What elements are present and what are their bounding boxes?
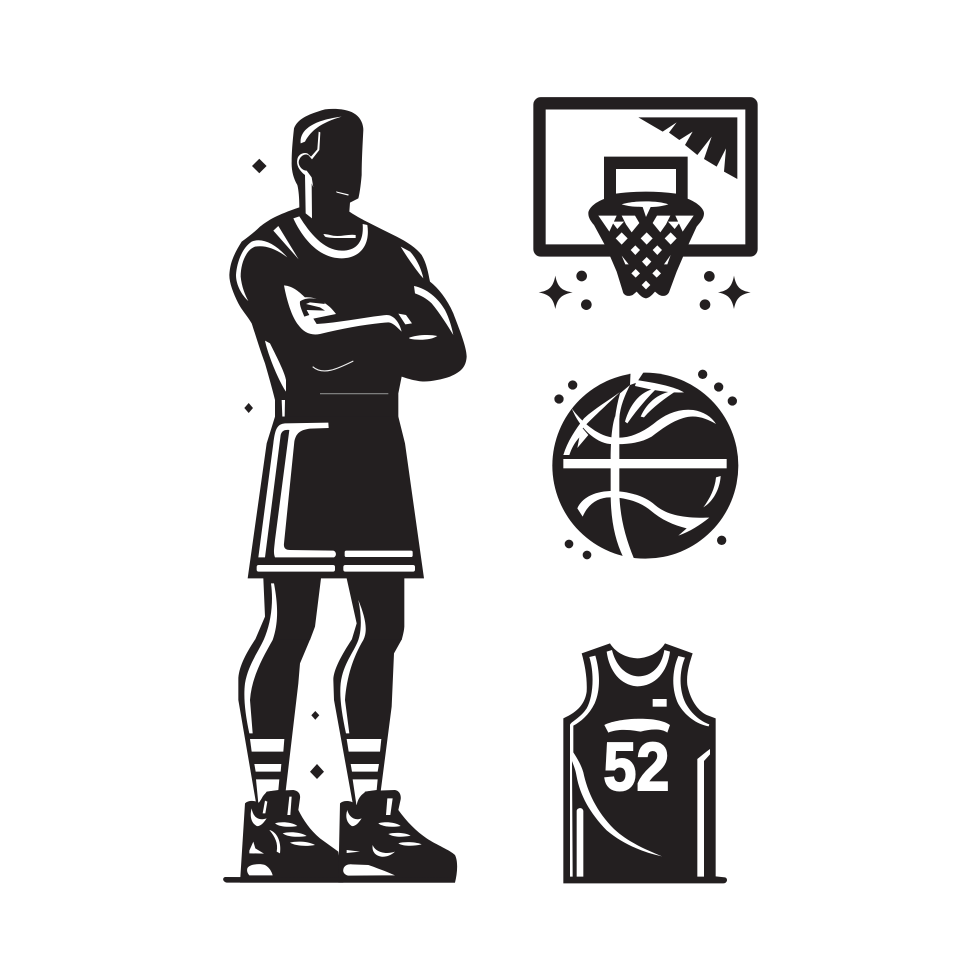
jersey xyxy=(563,643,727,883)
left armhole trim xyxy=(570,656,662,877)
upper left feather xyxy=(563,392,620,455)
jersey body xyxy=(563,643,727,883)
rim bracket xyxy=(604,157,688,200)
ball dots xyxy=(554,394,564,404)
floor line xyxy=(223,877,455,883)
upper wavy seam xyxy=(572,408,716,444)
player upper body xyxy=(229,109,467,420)
jersey number: 52 xyxy=(603,729,669,805)
rim and net xyxy=(588,192,704,298)
player shorts and thighs xyxy=(248,417,424,640)
torso highlights xyxy=(265,341,286,392)
lower wavy seam xyxy=(577,491,709,536)
upper right feather band xyxy=(635,380,684,393)
chest tag xyxy=(653,699,667,707)
abdomen lines xyxy=(313,361,353,371)
vertical seam xyxy=(611,417,634,559)
backboard shade xyxy=(638,117,737,179)
right side stripe xyxy=(697,749,710,877)
armhole stripe xyxy=(273,226,299,259)
hoop dots xyxy=(576,271,587,281)
legs xyxy=(238,640,310,807)
left side stripe xyxy=(577,808,583,877)
ball body xyxy=(552,373,738,559)
player legs and shoes xyxy=(223,583,457,883)
sparkle diamonds around player xyxy=(244,159,324,779)
right armhole trim xyxy=(673,656,709,726)
left shoe xyxy=(240,790,343,883)
ear and neck highlight xyxy=(297,132,320,218)
hair highlight xyxy=(301,117,342,143)
backboard xyxy=(539,103,751,250)
player figure xyxy=(223,109,467,883)
horizontal seam xyxy=(563,459,727,468)
collar trim xyxy=(607,650,670,686)
right crescent xyxy=(703,476,721,507)
sock bands xyxy=(250,739,284,752)
shorts stripes xyxy=(258,423,336,557)
leg highlights xyxy=(244,583,277,733)
basketball xyxy=(552,370,738,559)
collar xyxy=(293,216,368,258)
right shoulder highlights xyxy=(401,247,423,278)
top gap xyxy=(630,370,645,385)
basketball hoop xyxy=(539,103,751,310)
arched team name xyxy=(604,719,670,733)
shoe details xyxy=(247,797,422,876)
net openings xyxy=(598,201,694,289)
jaw tick xyxy=(336,191,349,196)
left shoulder highlight xyxy=(236,240,287,301)
knuckle highlights xyxy=(398,314,412,324)
right shoe xyxy=(338,790,457,883)
crossed forearm and hand xyxy=(284,285,402,334)
hoop sparkles xyxy=(539,276,573,309)
